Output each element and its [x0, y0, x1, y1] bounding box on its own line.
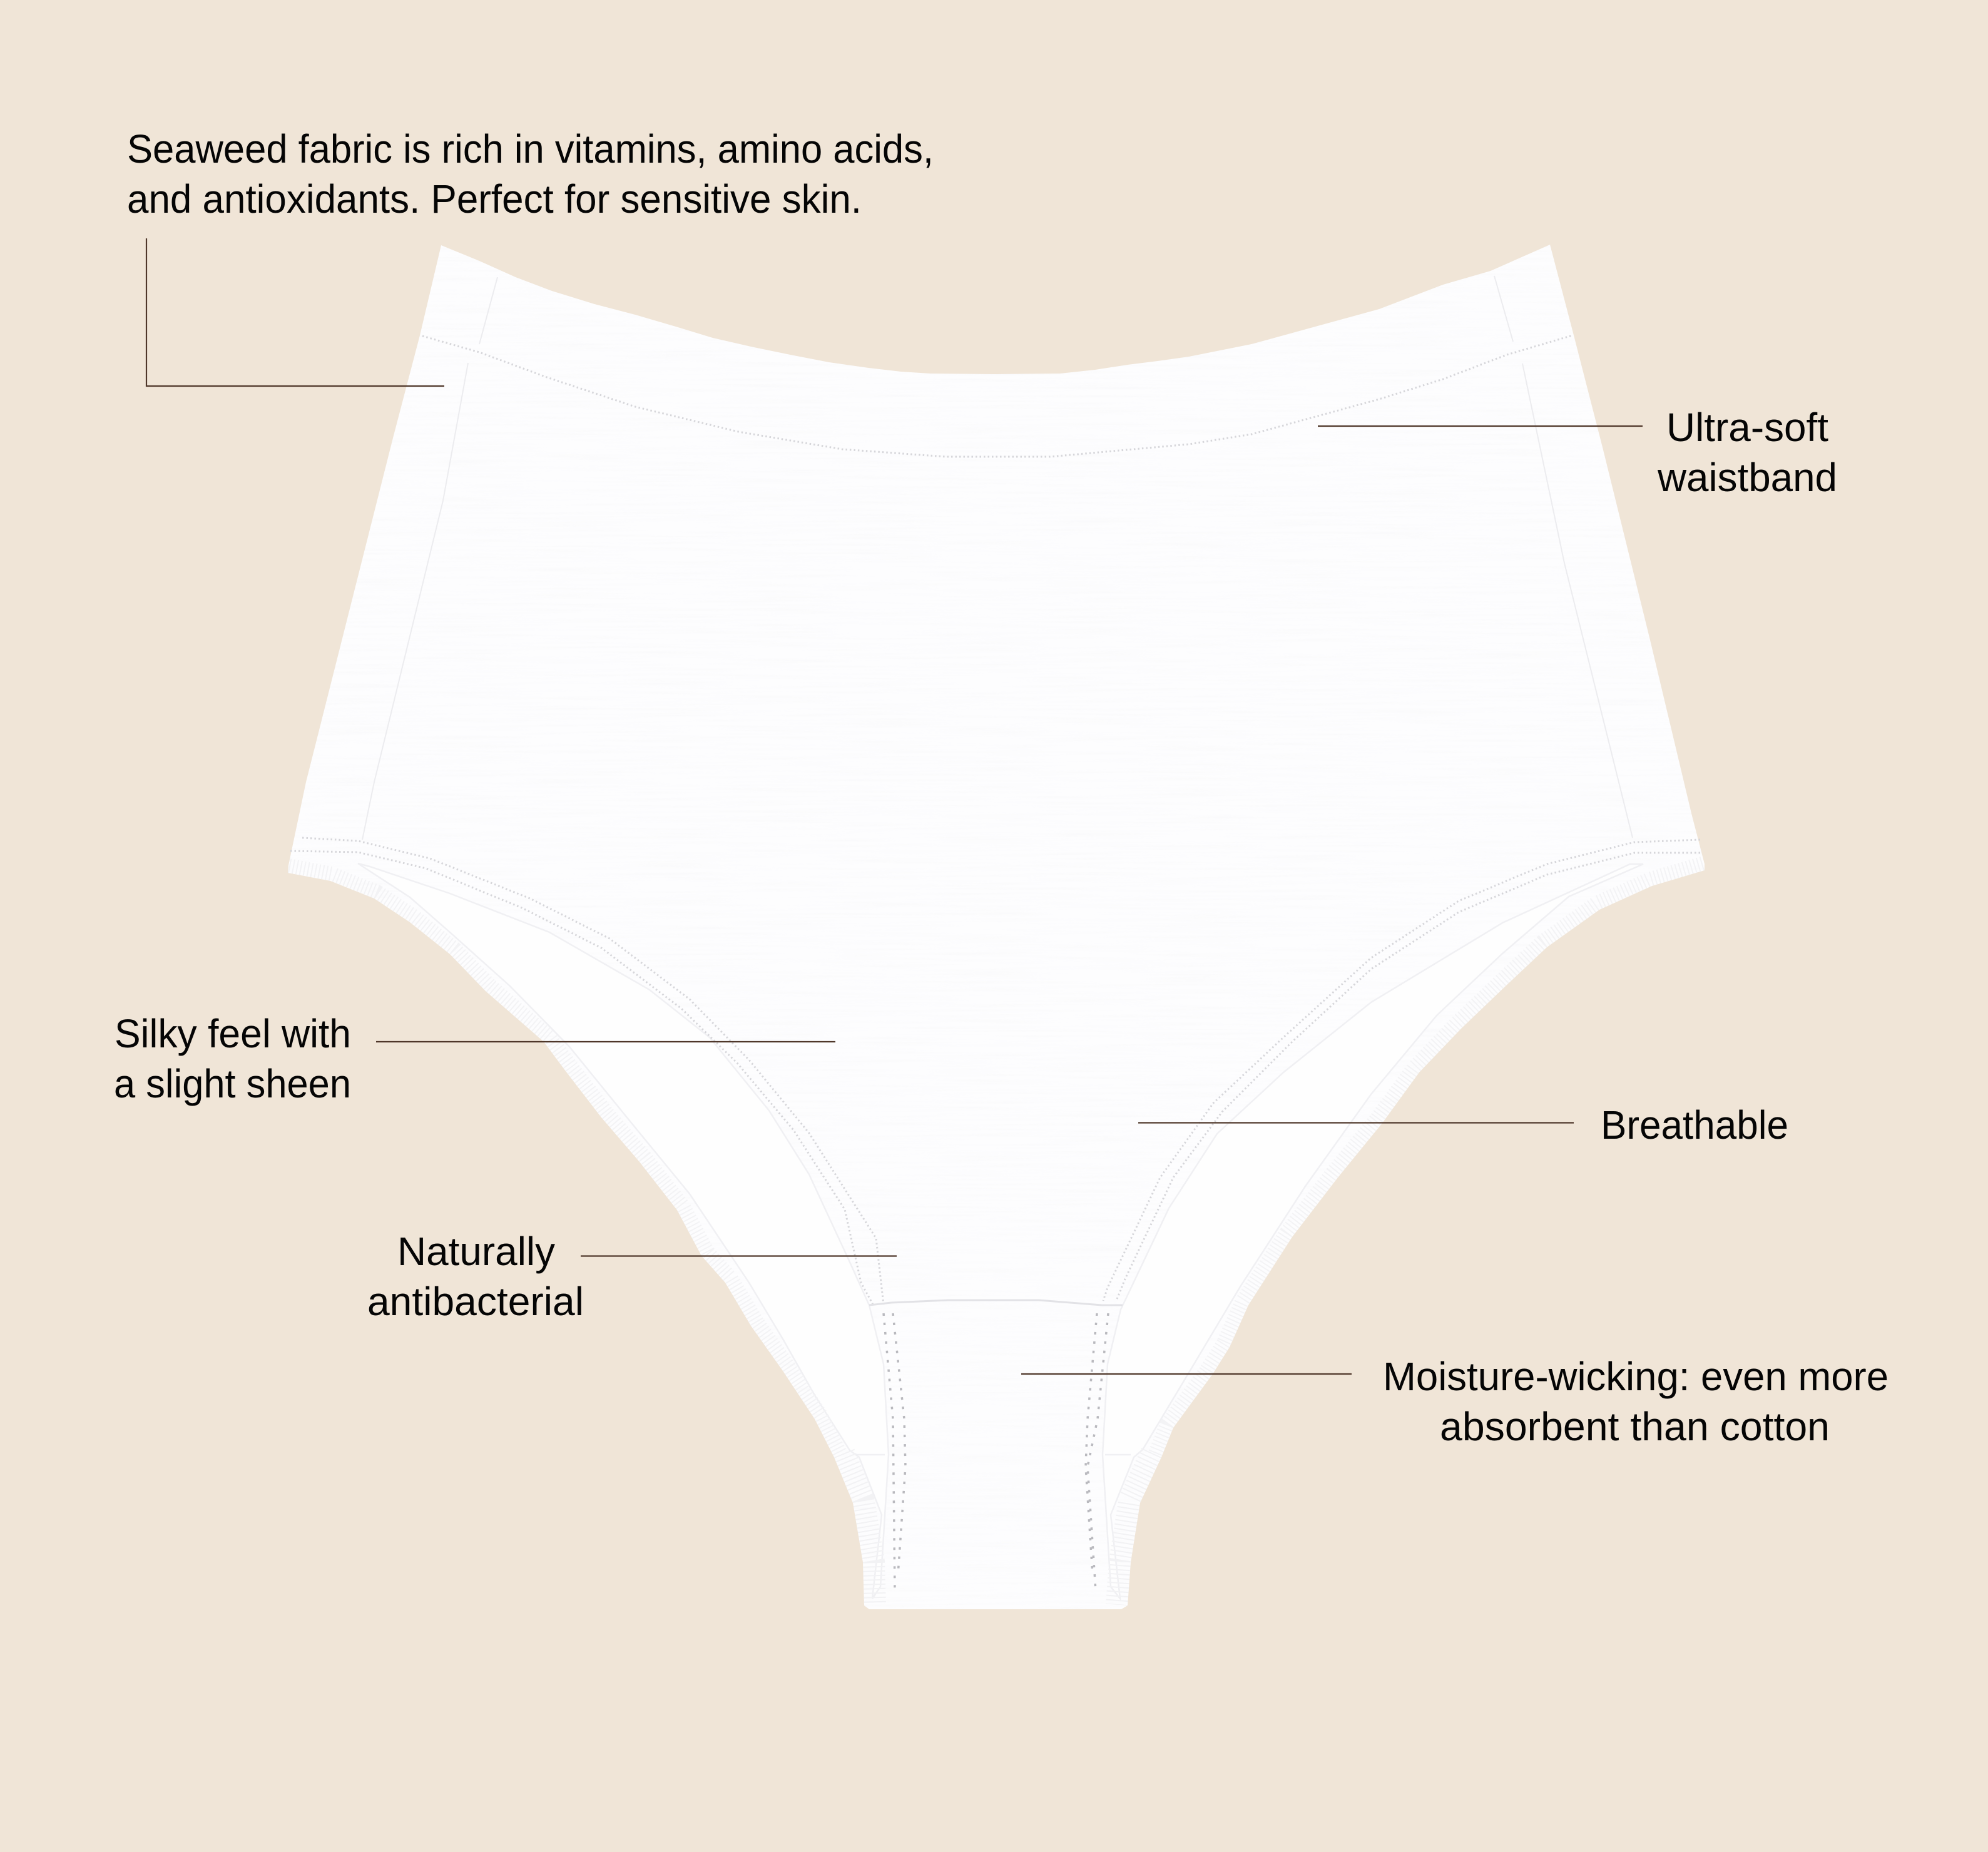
- callout: ultra-soft waistband: [1318, 405, 1837, 500]
- side seams: [362, 276, 1633, 840]
- label: waistband: [1657, 455, 1837, 500]
- illustration: white high-waisted underwear: [282, 238, 1715, 1614]
- leg opening stitching, right: [1103, 840, 1700, 1301]
- gusset top seam: [869, 1300, 1123, 1305]
- label: antibacterial: [367, 1279, 584, 1324]
- label: Ultra-soft: [1666, 405, 1828, 450]
- label: Breathable: [1601, 1102, 1788, 1147]
- lining cross seams: [856, 1454, 1131, 1455]
- label: [367, 1229, 584, 1324]
- left inner lining: [358, 863, 889, 1599]
- lace edging along leg openings: [288, 870, 1705, 1605]
- elbow leader line: [146, 238, 444, 386]
- callout: moisture-wicking: [1021, 1354, 1889, 1449]
- leader line: [581, 1255, 897, 1257]
- leg opening stitching, left: [290, 838, 884, 1305]
- label: Moisture-wicking: even more: [1383, 1354, 1889, 1399]
- waistband stitching: [422, 335, 1573, 457]
- gusset panel: [856, 1300, 1131, 1591]
- label: Silky feel with: [115, 1011, 351, 1056]
- leader line: [1318, 425, 1643, 427]
- leader line: [1021, 1373, 1352, 1375]
- label: [1383, 1354, 1889, 1449]
- callout: silky feel: [114, 1011, 835, 1106]
- right inner lining: [1103, 864, 1643, 1599]
- fabric texture: [282, 238, 1715, 1614]
- label: [1657, 405, 1837, 500]
- garment silhouette: [288, 245, 1705, 1609]
- gusset stitching: [884, 1313, 1108, 1591]
- label: a slight sheen: [114, 1061, 351, 1106]
- leader line: [376, 1041, 835, 1042]
- description text: [127, 126, 934, 221]
- label: Naturally: [397, 1229, 555, 1274]
- description text: and antioxidants. Perfect for sensitive skin.: [127, 176, 862, 221]
- leader line: [1138, 1122, 1574, 1124]
- callout: naturally antibacterial: [367, 1229, 897, 1324]
- label: absorbent than cotton: [1440, 1404, 1830, 1449]
- callout: seaweed fabric: [127, 126, 934, 386]
- description text: Seaweed fabric is rich in vitamins, amino acids,: [127, 126, 934, 171]
- label: [114, 1011, 351, 1106]
